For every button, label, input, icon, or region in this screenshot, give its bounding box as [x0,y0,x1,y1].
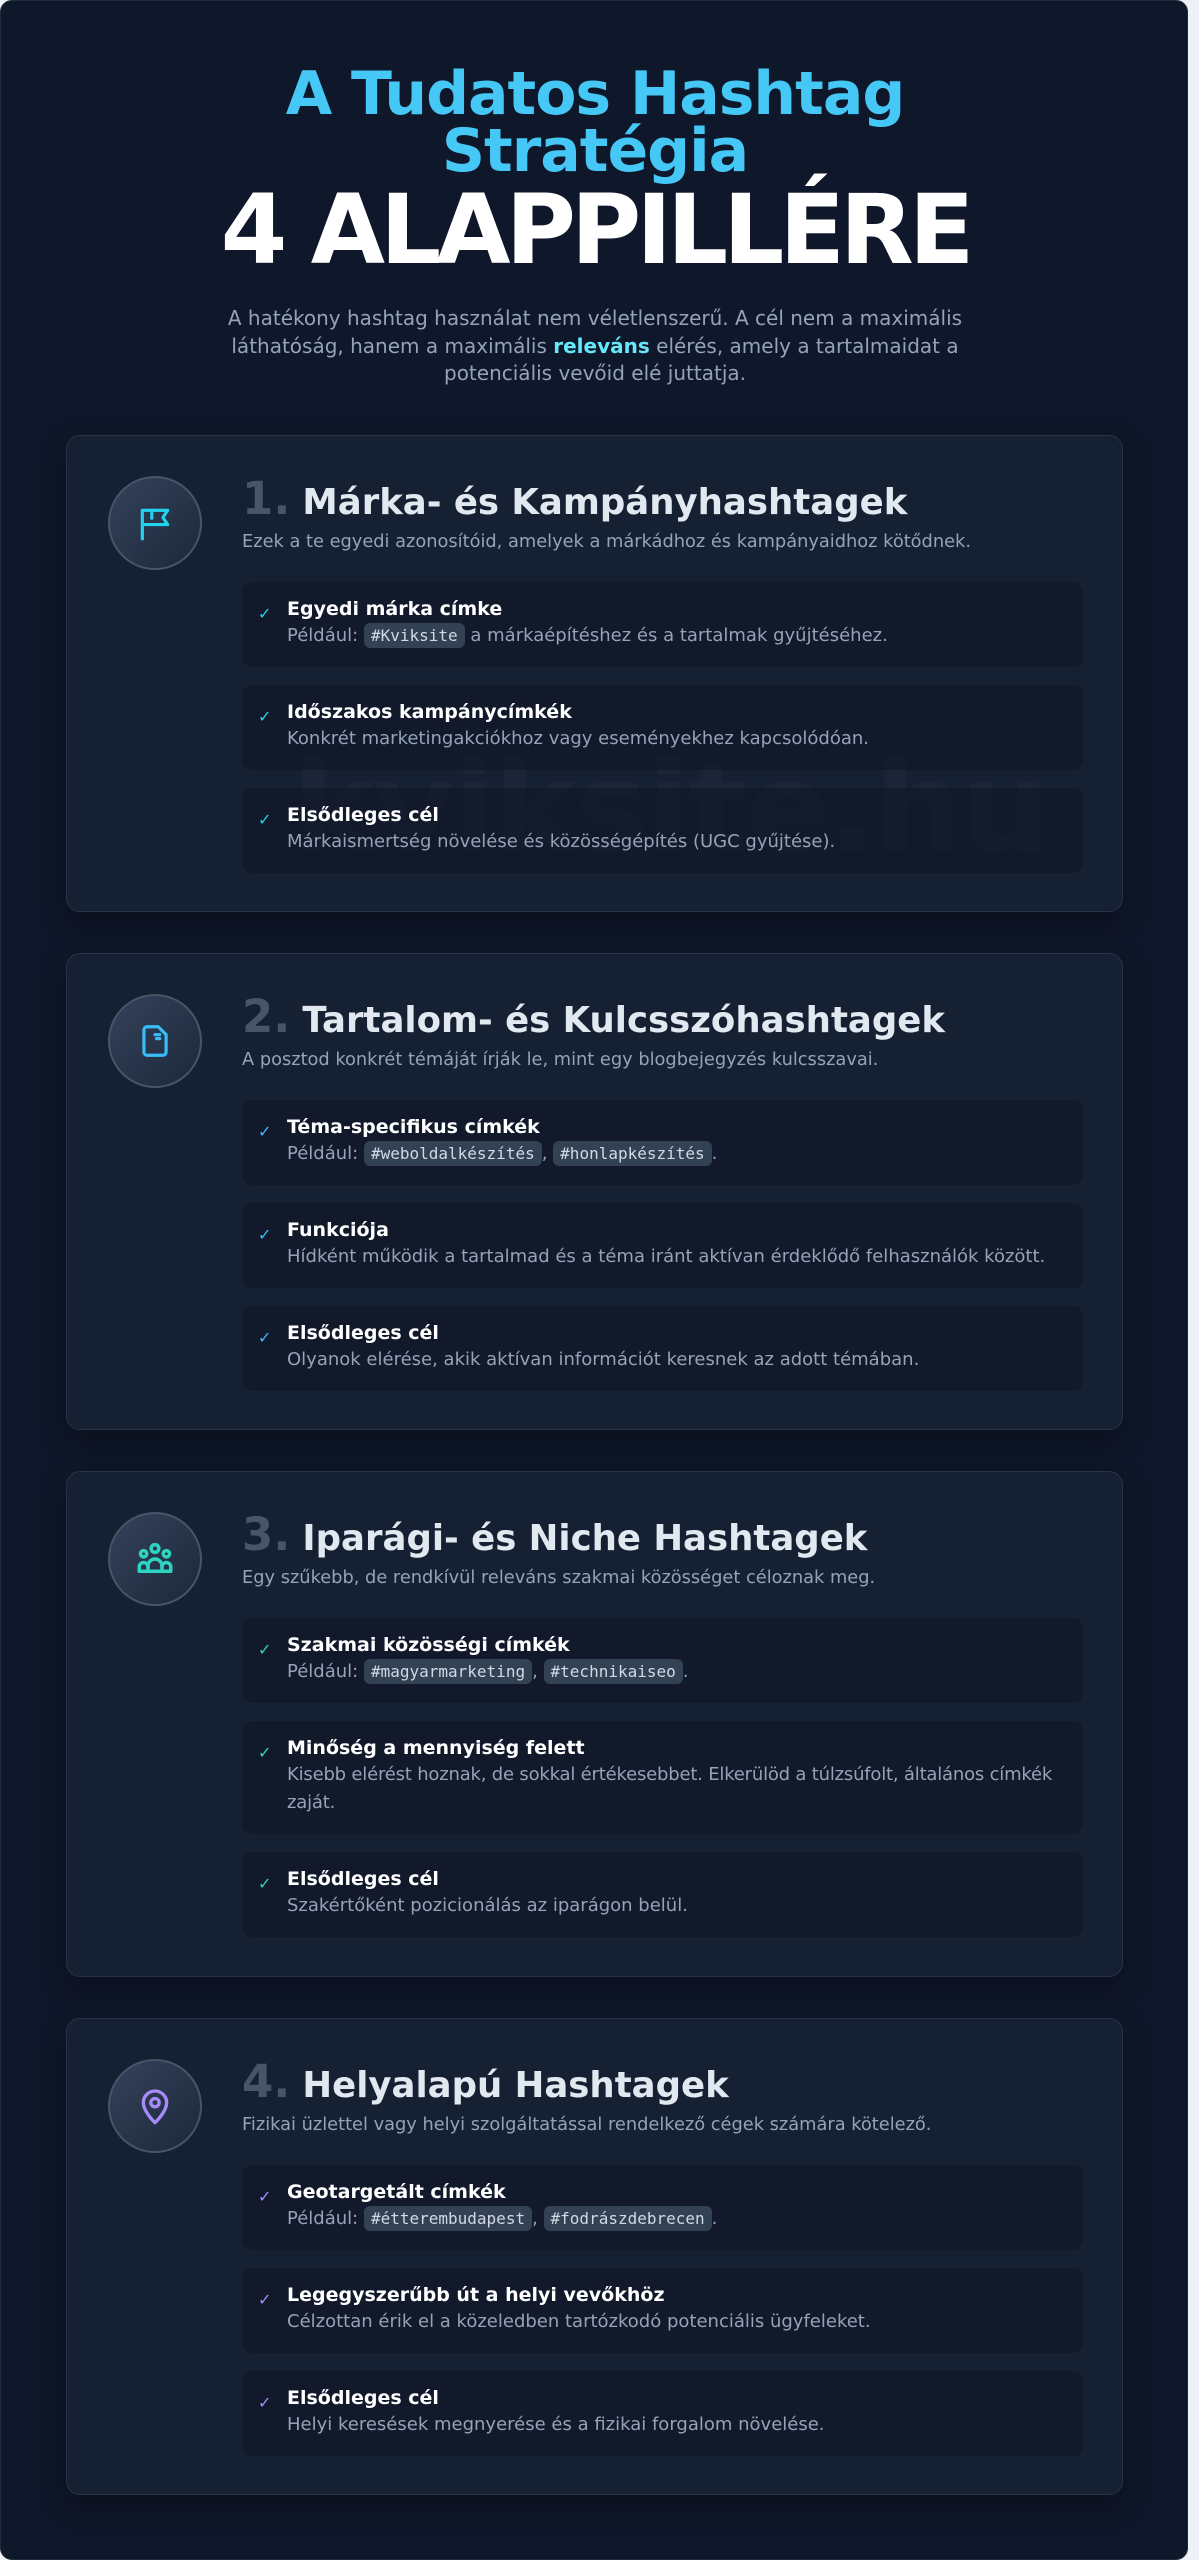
items: Téma-specifikus címkék [287,1116,540,1138]
heading [242,1508,868,1561]
heading: Helyalapú Hashtagek [302,2065,729,2106]
items: Legegyszerűbb út a helyi vevőkhöz [287,2284,665,2306]
heading: Tartalom- és Kulcsszóhashtagek [302,1000,945,1041]
items: ✓ [258,1328,271,1347]
items: Hídként működik a tartalmad és a téma iránt aktívan érdeklődő felhasználók között. [287,1246,1045,1267]
items: Például: #étterembudapest , #fodrászdebrecen . [287,2208,717,2229]
items: Például: #Kviksite a márkaépítéshez és a tartalmak gyűjtéséhez. [287,625,888,646]
items: ✓ [258,707,271,726]
description: Ezek a te egyedi azonosítóid, amelyek a márkádhoz és kampányaidhoz kötődnek. [242,531,971,552]
heading: 4 pillars: 4 ALAPPILLÉRE [221,174,969,286]
intro text: A hatékony hashtag használat nem véletlenszerű. A cél nem a maximális láthatóság, hanem a maximális releváns elérés, amely a tartalmaidat a potenciális vevőid elé juttatja. [228,306,962,385]
items: Elsődleges cél [287,1868,439,1890]
panel: card 4 [66,2018,1123,2495]
icon: document [108,994,202,1088]
description: Fizikai üzlettel vagy helyi szolgáltatással rendelkező cégek számára kötelező. [242,2114,931,2135]
icon: map pin [108,2059,202,2153]
items: ✓ [258,2393,271,2412]
heading: Márka- és Kampányhashtagek [302,482,907,523]
items: ✓ [258,1874,271,1893]
items: Például: #magyarmarketing , #technikaiseo . [287,1661,688,1682]
panel: card 3 [66,1471,1123,1977]
items: Konkrét marketingakciókhoz vagy eseményekhez kapcsolódóan. [287,728,869,749]
items [243,2170,1078,2456]
items: Olyanok elérése, akik aktívan információt keresnek az adott témában. [287,1349,919,1370]
items: ✓ [258,1743,271,1762]
items: Például: #weboldalkészítés , #honlapkészítés . [287,1143,717,1164]
items: ✓ [258,1225,271,1244]
items: Geotargetált címkék [287,2181,506,2203]
items: Elsődleges cél [287,804,439,826]
items: Elsődleges cél [287,1322,439,1344]
heading [242,2055,730,2108]
heading: 2. [242,990,290,1043]
title: A Tudatos Hashtag [286,59,904,129]
heading: 3. [242,1508,290,1561]
items: Szakmai közösségi címkék [287,1634,570,1656]
items: ✓ [258,1640,271,1659]
icon: flag [108,476,202,570]
items: Funkciója [287,1219,389,1241]
items: Egyedi márka címke [287,598,502,620]
panel: card 2 [66,953,1123,1430]
items [243,1624,1078,1936]
items: ✓ [258,2187,271,2206]
items: Célzottan érik el a közeledben tartózkodó potenciális ügyfeleket. [287,2311,871,2332]
items: ✓ [258,2290,271,2309]
items: ✓ [258,604,271,623]
items: Szakértőként pozicionálás az iparágon belül. [287,1895,688,1916]
heading: 4. [242,2055,290,2108]
icon: users [108,1512,202,1606]
items: ✓ [258,810,271,829]
items [243,588,1078,872]
items: Márkaismertség növelése és közösségépítés (UGC gyűjtése). [287,831,835,852]
panel: card 1 [66,435,1123,912]
items: Helyi keresések megnyerése és a fizikai forgalom növelése. [287,2414,825,2435]
items: ✓ [258,1122,271,1141]
items: Minőség a mennyiség felett [287,1737,585,1759]
heading: Iparági- és Niche Hashtagek [302,1518,867,1559]
description: A posztod konkrét témáját írják le, mint egy blogbejegyzés kulcsszavai. [242,1049,878,1070]
items: Elsődleges cél [287,2387,439,2409]
items: Időszakos kampánycímkék [287,701,572,723]
watermark: kviksite.hu [292,736,1048,881]
items: Kisebb elérést hoznak, de sokkal értékesebbet. Elkerülöd a túlzsúfolt, általános címkék zaját. [287,1764,1052,1813]
description: Egy szűkebb, de rendkívül releváns szakmai közösséget céloznak meg. [242,1567,875,1588]
title [286,59,904,186]
heading: 1. [242,472,290,525]
items [243,1106,1078,1390]
title: Stratégia [442,116,748,186]
